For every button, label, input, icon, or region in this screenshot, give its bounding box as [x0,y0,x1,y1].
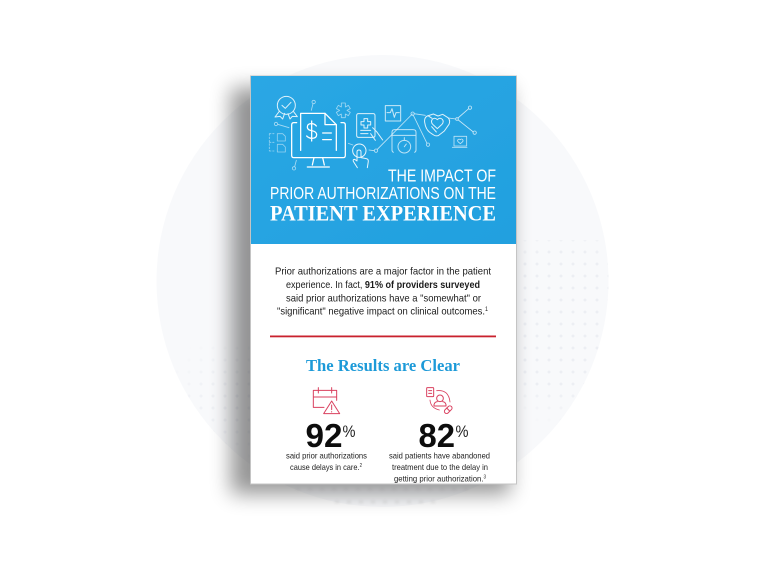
caption: abandoned treatment: getting prior authorization. [394,474,492,484]
icon: right network nodes [449,106,476,134]
icon: browser with stopwatch [392,130,416,153]
title: PRIOR AUTHORIZATIONS ON THE [270,183,496,203]
icon: hands holding heart [425,114,450,136]
icon: award badge [275,96,297,119]
intro paragraph: experience. In fact, 91% of providers surveyed [286,279,480,291]
header illustration [269,96,476,170]
intro paragraph: 1 [485,307,489,313]
intro paragraph: "significant" negative impact on clinical outcomes. [277,306,508,318]
infographic page [176,68,608,508]
caption: abandoned treatment: treatment due to the delay in [392,462,488,472]
figure: 92 percent: 92 [306,417,342,454]
title: THE IMPACT OF [388,166,496,186]
icon: patient with pill [427,388,453,414]
intro paragraph [275,266,491,318]
icon: pointer hand [353,144,368,168]
caption: delays in care [286,450,367,472]
intro paragraph: Prior authorizations are a major factor in the patient [275,266,491,278]
red divider [270,336,496,337]
caption: delays in care: 2 [360,463,362,469]
title: PATIENT EXPERIENCE [270,200,496,226]
caption: abandoned treatment: 3 [483,474,486,480]
icon: tablet with cross [357,114,383,140]
icon: connector nodes [274,100,353,170]
icon: monitor with invoice [292,113,345,167]
icon: medical cross outline [336,103,350,118]
figure: 82 percent: % [456,422,468,441]
intro paragraph: said prior authorizations have a "somewhat" or [286,292,481,304]
caption: delays in care: said prior authorizations [286,450,367,460]
icon: calendar with warning [313,388,340,414]
icon: file tree [269,134,285,152]
caption: delays in care: cause delays in care. [290,462,370,472]
section heading: The Results are Clear [306,356,460,375]
icon: laptop with heart [452,136,467,147]
icon: heartbeat panel [385,106,401,121]
panel: blue header [251,76,516,244]
figure: 92 percent: % [342,422,356,441]
panel: 92% statistic [286,388,367,472]
panel: 82% statistic [389,388,490,484]
caption: abandoned treatment: said patients have abandoned [389,450,490,460]
card drop shadow [231,88,510,502]
icon: network lines [369,112,430,152]
figure: 82 percent: 82 [418,417,455,454]
caption: abandoned treatment [389,450,490,484]
title [270,166,496,226]
background circle with dot pattern [176,240,608,446]
document card [250,76,517,484]
